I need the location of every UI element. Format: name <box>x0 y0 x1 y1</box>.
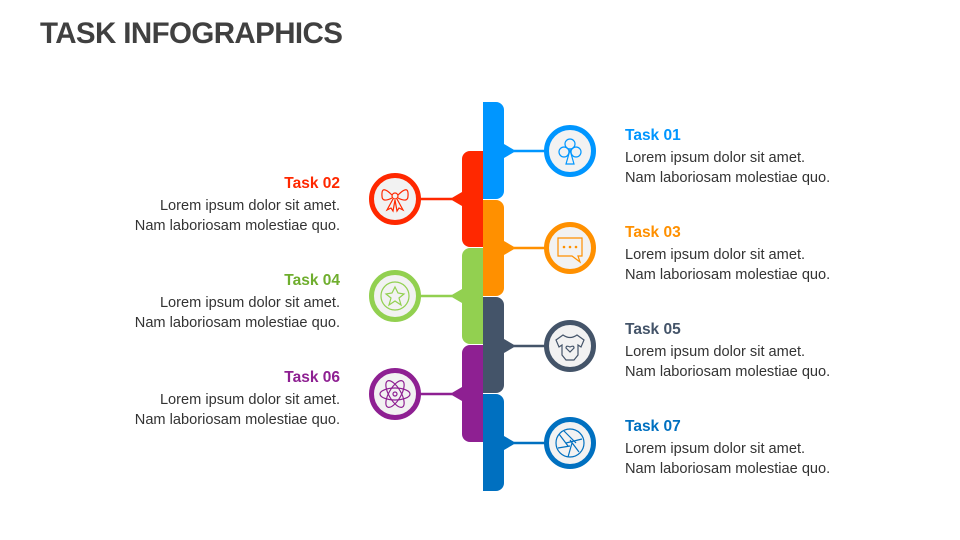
segment: task 02 <box>372 151 483 247</box>
text: task 02 <box>135 175 340 234</box>
text: task 06: Nam laboriosam molestiae quo. <box>135 412 340 428</box>
title: TASK INFOGRAPHICS <box>40 17 342 50</box>
segment: task 03 <box>483 200 594 296</box>
text: task 04: Nam laboriosam molestiae quo. <box>135 315 340 331</box>
text: task 03: Lorem ipsum dolor sit amet. <box>625 247 805 263</box>
text: task 01: Nam laboriosam molestiae quo. <box>625 170 830 186</box>
icon: chat <box>558 238 582 262</box>
text: task 06: Lorem ipsum dolor sit amet. <box>160 392 340 408</box>
segment: task 04 <box>372 248 483 344</box>
text: task 04 <box>135 272 340 331</box>
text: task 05: Lorem ipsum dolor sit amet. <box>625 344 805 360</box>
segment: task 06 <box>372 345 483 442</box>
icon: club <box>559 139 581 164</box>
text: task 04: Lorem ipsum dolor sit amet. <box>160 295 340 311</box>
icon: bodysuit <box>556 335 584 360</box>
text: task 03: Nam laboriosam molestiae quo. <box>625 267 830 283</box>
text: task 07: Nam laboriosam molestiae quo. <box>625 461 830 477</box>
text: task 05 <box>625 321 830 380</box>
text: task 07: Lorem ipsum dolor sit amet. <box>625 441 805 457</box>
text: task 01 <box>625 127 830 186</box>
icon: atom <box>380 378 410 410</box>
text: task 03: Task 03 <box>625 224 681 241</box>
text: task 05: Task 05 <box>625 321 681 338</box>
text: task 03 <box>625 224 830 283</box>
text: task 07 <box>625 418 830 477</box>
segment: task 05 <box>483 297 594 393</box>
text: task 02: Task 02 <box>284 175 340 192</box>
text: task 04: Task 04 <box>284 272 340 289</box>
icon: bow <box>382 190 408 211</box>
text: task 02: Nam laboriosam molestiae quo. <box>135 218 340 234</box>
text: task 05: Nam laboriosam molestiae quo. <box>625 364 830 380</box>
text: task 06: Task 06 <box>284 369 340 386</box>
segment: task 01 <box>483 102 594 199</box>
text: task 01: Lorem ipsum dolor sit amet. <box>625 150 805 166</box>
icon: star badge <box>381 282 409 310</box>
segment: task 07 <box>483 394 594 491</box>
text: task 01: Task 01 <box>625 127 681 144</box>
icon: aperture <box>556 429 584 457</box>
text: task 02: Lorem ipsum dolor sit amet. <box>160 198 340 214</box>
text: task 06 <box>135 369 340 428</box>
text: task 07: Task 07 <box>625 418 681 435</box>
